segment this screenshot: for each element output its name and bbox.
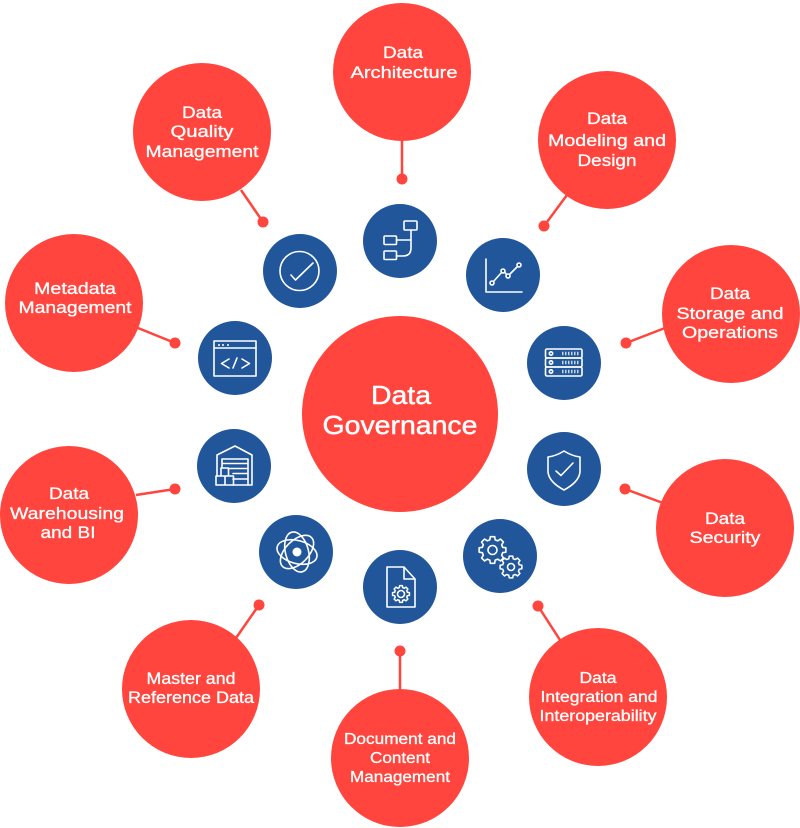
node: Document and Content Management: Management: [350, 769, 451, 786]
node: Data Integration and Interoperability: Integration and: [540, 689, 658, 706]
node: Data Integration and Interoperability: Interoperability: [540, 708, 657, 725]
icon: warehouse: [197, 429, 271, 503]
icon: check mark circle: [263, 234, 337, 308]
node: Data Storage and Operations: Operations: [682, 324, 778, 342]
node: Metadata Management: Management: [18, 299, 132, 317]
node: Master and Reference Data: Reference Data: [128, 689, 255, 707]
node: Data Warehousing and BI: Data: [49, 485, 90, 503]
node: Data Modeling and Design: Design: [578, 152, 636, 170]
node: Data Modeling and Design: Data: [587, 110, 628, 128]
node: Metadata Management: [5, 234, 180, 372]
node: Data Architecture: [333, 3, 471, 184]
node: Data Storage and Operations: [620, 245, 800, 383]
node: Data Warehousing and BI: Warehousing: [10, 505, 124, 523]
node: Master and Reference Data: Master and: [146, 670, 236, 688]
icon: shield with check: [527, 432, 601, 506]
icon: code window: [198, 321, 272, 395]
node: Data Integration and Interoperability: [529, 600, 667, 766]
node: Data Quality Management: Data: [182, 104, 223, 122]
center hub: Data Governance: Data: [371, 380, 432, 410]
node: Data Quality Management: Management: [146, 143, 259, 161]
node: Data Modeling and Design: [538, 71, 676, 232]
node: Data Quality Management: [133, 63, 271, 228]
icon: line chart: [466, 238, 540, 312]
node: Data Architecture: Architecture: [350, 64, 458, 82]
icon: gears: [463, 519, 537, 593]
node: Metadata Management: Metadata: [34, 280, 117, 298]
node: Data Security: [620, 459, 794, 597]
icon: flow diagram: [363, 204, 437, 278]
node: Document and Content Management: Content: [370, 750, 431, 767]
node: Data Quality Management: Quality: [170, 123, 234, 141]
node: Data Security: Security: [690, 529, 761, 547]
node: Data Warehousing and BI: and BI: [40, 524, 96, 542]
node: Data Architecture: Data: [383, 44, 424, 62]
icon: server rack: [527, 326, 601, 400]
node: Master and Reference Data: [122, 600, 264, 758]
node: Data Warehousing and BI: [0, 446, 180, 584]
node: Data Security: Data: [705, 510, 746, 528]
node: Data Storage and Operations: Storage and: [676, 305, 784, 323]
node: Document and Content Management: [331, 646, 469, 827]
node: Data Storage and Operations: Data: [710, 285, 751, 303]
icon: document with gear: [363, 550, 437, 624]
node: Data Integration and Interoperability: Data: [580, 670, 617, 687]
center hub: Data Governance: Governance: [322, 410, 478, 440]
node: Data Modeling and Design: Modeling and: [548, 132, 666, 150]
node: Document and Content Management: Document and: [344, 731, 456, 748]
center hub: Data Governance: [302, 316, 498, 512]
icon: atom: [259, 515, 333, 589]
